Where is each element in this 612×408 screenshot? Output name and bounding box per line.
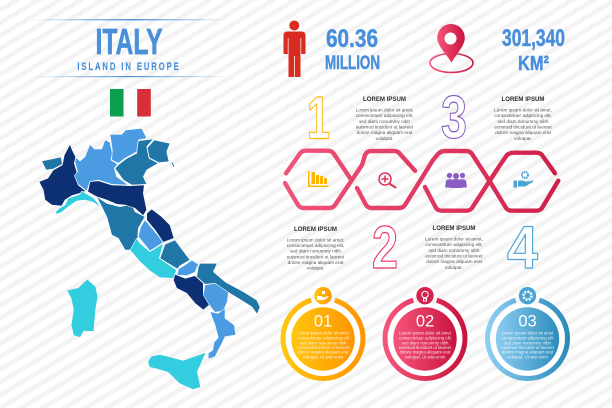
population stat (284, 20, 380, 77)
card text: sed diam nonummy nibh (300, 340, 347, 346)
text block 1 (356, 96, 414, 141)
subtitle: ISLAND IN EUROPE (77, 61, 181, 73)
text block 3: Lorem ipsum dolor sit amet, (494, 108, 552, 112)
title block (32, 19, 228, 77)
text block 2: volutpat. (307, 266, 324, 271)
card text: consectetuer adipiscing elit (297, 336, 350, 340)
card text: euismod tincidunt ut laoreet (501, 345, 555, 350)
text block 1: consectetuer adipiscing elit, (356, 113, 413, 118)
area stat (430, 24, 565, 75)
text block 4: LOREM IPSUM (432, 225, 476, 232)
text block 2: sed diam nonummy nibh (290, 249, 341, 254)
value: 301,340: 301,340 (502, 25, 565, 52)
region: Sicily (148, 353, 205, 389)
region: Tuscany (97, 197, 145, 250)
icon: hand holding gear (514, 172, 533, 188)
icon: person (284, 20, 306, 77)
card text: Lorem ipsum dolor sit amet (399, 330, 452, 336)
number 01: 01 (314, 312, 332, 330)
icon: magnifier (379, 173, 396, 188)
text block 4: dolore magna aliquam erat (426, 259, 483, 264)
text block 1: euismod tincidunt ut laoreet (356, 124, 414, 130)
region: Trentino (110, 128, 147, 163)
text block 4: Lorem ipsum dolor sit amet, (425, 236, 483, 242)
card text: dolore magna aliquam erat (297, 350, 349, 354)
text block 2: euismod tincidunt ut laoreet (287, 254, 345, 260)
heading: ITALY: ITALY (96, 21, 162, 62)
text block 4: consectetuer adipiscing elit, (425, 242, 483, 247)
card text: Lorem ipsum dolor sit amet (502, 330, 554, 336)
number 03: 03 (518, 312, 537, 330)
icon: gear (524, 292, 532, 300)
card text (501, 330, 555, 360)
text block 3: volutpat. (514, 136, 532, 141)
icon: people group (445, 173, 467, 188)
region: Puglia (197, 263, 260, 314)
card text: dolore magna aliquam erat (399, 350, 451, 354)
region: Calabria (208, 308, 236, 359)
value: 60.36: 60.36 (326, 25, 378, 53)
label: square kilometres: KM² (518, 53, 549, 75)
card text: consectetuer adipiscing elit (502, 336, 554, 340)
region: Trieste (172, 162, 174, 168)
region: Abruzzo (160, 240, 190, 269)
region: Emilia-Romagna (88, 181, 147, 216)
text block 1: Lorem ipsum dolor sit amet, (356, 108, 413, 112)
icon: bar chart (308, 171, 328, 187)
text block 3: dolore magna aliquam erat (495, 130, 552, 135)
text block 1: sed diam nonummy nibh (359, 119, 410, 124)
icon: location pin (430, 24, 473, 72)
text block 4: volutpat. (445, 265, 463, 270)
map of Italy (39, 128, 260, 389)
card text (297, 330, 350, 360)
text block 2: Lorem ipsum dolor sit amet, (287, 238, 344, 242)
card text: sed diam nonummy nibh (504, 340, 552, 346)
number 02: 02 (416, 312, 434, 330)
region: Lazio (130, 238, 177, 278)
card text: euismod tincidunt ut laoreet (399, 345, 452, 350)
hexagon chain (285, 151, 558, 211)
numeral 4: 4 (507, 214, 539, 281)
region: Liguria (55, 191, 102, 214)
region: Sardinia (68, 280, 97, 337)
text block 4: sed diam nonummy nibh (428, 248, 480, 253)
text block 2: dolore magna aliquam erat (288, 260, 344, 265)
text block 1: volutpat. (376, 136, 393, 141)
text block 3: euismod tincidunt ut laoreet (494, 124, 552, 130)
numeral 2: 2 (372, 214, 398, 281)
text block 3: consectetuer adipiscing elit, (494, 113, 552, 118)
circle card 02 (385, 287, 465, 378)
text block 1: LOREM IPSUM (363, 96, 406, 103)
label: MILLION: MILLION (325, 52, 380, 74)
region: Umbria (138, 220, 163, 251)
card text (399, 330, 452, 360)
card text: sed diam nonummy nibh (402, 340, 449, 346)
text block 4 (425, 225, 483, 270)
card text: dolore magna aliquam erat (502, 350, 554, 354)
region: Valle d'Aosta (42, 157, 62, 170)
circle card 03 (488, 287, 568, 378)
numeral 1: 1 (307, 84, 330, 152)
card text: euismod tincidunt ut laoreet (297, 345, 350, 350)
card text: volutpat. Ut wisi enim (405, 354, 446, 360)
region: Veneto (115, 139, 158, 185)
region: Marche (147, 209, 174, 242)
circle card 01 (283, 287, 363, 378)
region: Basilicata (203, 283, 228, 312)
icon: hand (317, 291, 328, 300)
region: Friuli (147, 140, 170, 163)
icon: light bulb (422, 291, 428, 301)
region: Campania (173, 274, 209, 310)
region: Lombardy (74, 140, 128, 191)
text block 2 (287, 226, 345, 271)
icon: Italian flag (110, 89, 151, 116)
text block 3 (494, 96, 552, 141)
text block 4: euismod tincidunt ut laoreet (425, 254, 483, 258)
text block 2: LOREM IPSUM (294, 226, 337, 233)
card text: volutpat. Ut wisi enim (507, 354, 548, 360)
text block 3: LOREM IPSUM (502, 96, 544, 103)
text block 2: consectetuer adipiscing elit, (287, 243, 344, 248)
region: Piedmont (39, 144, 86, 206)
card text: Lorem ipsum dolor sit amet (297, 330, 350, 336)
card text: volutpat. Ut wisi enim (303, 354, 344, 360)
region: Molise (177, 260, 198, 276)
text block 1: dolore magna aliquam erat (357, 130, 413, 135)
numeral 3: 3 (441, 84, 467, 151)
card text: consectetuer adipiscing elit (399, 336, 452, 340)
text block 3: sed diam nonummy nibh (497, 119, 549, 124)
